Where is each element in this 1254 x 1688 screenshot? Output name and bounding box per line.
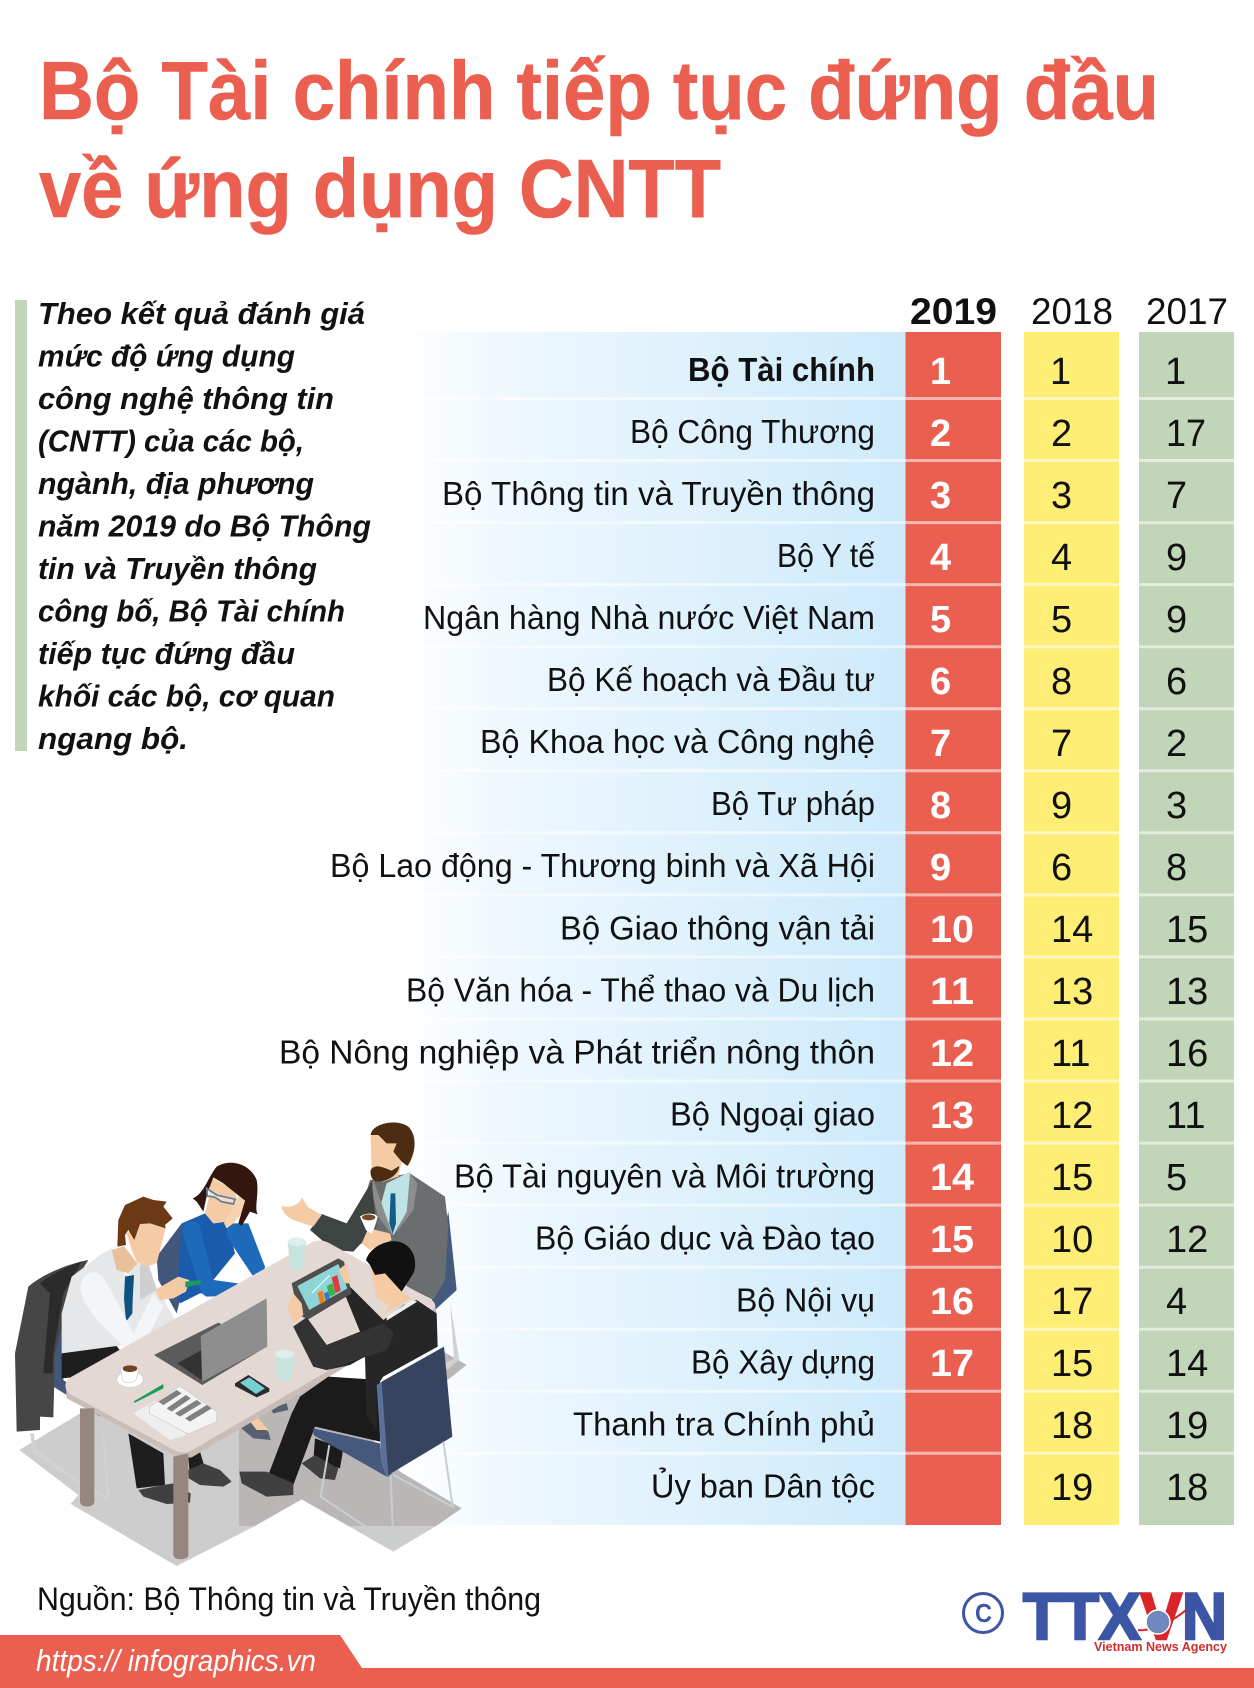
- accent bar: [15, 300, 27, 751]
- row 13: 13: [930, 1095, 974, 1137]
- row 11: 13: [1051, 971, 1093, 1013]
- row 9: Bộ Lao động - Thương binh và Xã Hội: [330, 847, 875, 884]
- row 10: Bộ Giao thông vận tải: [560, 910, 875, 946]
- jacket: [293, 1287, 438, 1430]
- shirt and tie: [62, 1248, 175, 1355]
- person: man in white shirt: [15, 1197, 232, 1504]
- row 10: 15: [1166, 909, 1208, 951]
- column headings: 2019: [910, 291, 997, 332]
- head: [112, 1246, 137, 1273]
- row 1: 1: [1165, 351, 1186, 393]
- row 1: [688, 351, 1186, 393]
- row 13: [670, 1095, 1205, 1137]
- row 9: 9: [930, 847, 951, 889]
- row 15: [535, 1219, 1208, 1261]
- intro paragraph: công bố, Bộ Tài chính: [38, 594, 345, 628]
- row 4: Bộ Y tế: [777, 537, 875, 574]
- row background gradient: [408, 332, 906, 1525]
- wordmark: TTXVN: [1023, 1579, 1227, 1653]
- row 7: 2: [1166, 723, 1187, 765]
- row 14: 14: [930, 1157, 974, 1199]
- row 8: 9: [1051, 785, 1072, 827]
- column: 2019: [906, 332, 1001, 1525]
- row 18: 18: [1051, 1405, 1093, 1447]
- row 16: 4: [1166, 1281, 1187, 1323]
- row 16: 16: [930, 1281, 974, 1323]
- row 2: 2: [930, 413, 951, 455]
- row 17: 15: [1051, 1343, 1093, 1385]
- panel: ranking table: [279, 291, 1234, 1525]
- row 11: 13: [1166, 971, 1208, 1013]
- row 19: [651, 1467, 1208, 1509]
- row 3: 3: [930, 475, 951, 517]
- illustration: meeting around a table: [15, 1123, 467, 1566]
- tablet: [292, 1258, 352, 1319]
- row 19: 18: [1166, 1467, 1208, 1509]
- chair and jacket: [53, 1287, 100, 1417]
- floor shadows: [19, 1352, 467, 1566]
- row 6: 8: [1051, 661, 1072, 703]
- row 14: 5: [1166, 1157, 1187, 1199]
- row 15: 12: [1166, 1219, 1208, 1261]
- person: man in dark suit with tablet: [239, 1241, 453, 1545]
- person: woman in blue: [157, 1163, 290, 1313]
- row 15: 15: [930, 1219, 974, 1261]
- row 19: 19: [1051, 1467, 1093, 1509]
- footer bar: [0, 1635, 1254, 1688]
- column headings: [910, 291, 1228, 332]
- row 10: [560, 909, 1208, 951]
- row 16: Bộ Nội vụ: [736, 1282, 875, 1318]
- website URL: https:// infographics.vn: [36, 1643, 316, 1678]
- row 14: Bộ Tài nguyên và Môi trường: [454, 1158, 875, 1194]
- hands: [287, 1293, 303, 1323]
- row 5: Ngân hàng Nhà nước Việt Nam: [423, 599, 875, 636]
- row 15: Bộ Giáo dục và Đào tạo: [535, 1220, 875, 1256]
- row 5: 5: [930, 599, 951, 641]
- row 4: 9: [1166, 537, 1187, 579]
- row 6: Bộ Kế hoạch và Đầu tư: [547, 661, 875, 698]
- row 2: Bộ Công Thương: [630, 413, 875, 450]
- intro paragraph: tin và Truyền thông: [38, 551, 317, 586]
- row 11: [406, 971, 1208, 1013]
- row 3: [442, 475, 1187, 517]
- row 1: 1: [1050, 351, 1071, 393]
- row 17: 17: [930, 1343, 974, 1385]
- head: [370, 1267, 412, 1313]
- row 19: Ủy ban Dân tộc: [651, 1468, 875, 1504]
- intro paragraph: tiếp tục đứng đầu: [38, 636, 295, 671]
- row 5: 5: [1051, 599, 1072, 641]
- pen: [133, 1384, 163, 1403]
- row 2: 17: [1166, 413, 1206, 455]
- chair: [313, 1428, 387, 1477]
- row 11: 11: [930, 971, 974, 1013]
- row 3: 3: [1051, 475, 1072, 517]
- panel: intro text: [15, 296, 371, 756]
- row 8: [711, 785, 1187, 827]
- row 14: 15: [1051, 1157, 1093, 1199]
- row 1: Bộ Tài chính: [688, 351, 875, 388]
- row 12: [279, 1033, 1208, 1075]
- logo: TTXVN: [964, 1579, 1228, 1654]
- column headings: 2018: [1031, 291, 1113, 332]
- row 6: [547, 661, 1187, 703]
- row 18: [573, 1405, 1208, 1447]
- row 12: 16: [1166, 1033, 1208, 1075]
- row 12: Bộ Nông nghiệp và Phát triển nông thôn: [279, 1034, 875, 1070]
- row 9: [330, 847, 1187, 889]
- papers: [133, 1386, 217, 1440]
- row 1: 1: [930, 351, 951, 393]
- intro paragraph: Theo kết quả đánh giá: [38, 296, 365, 331]
- intro paragraph: ngành, địa phương: [38, 466, 314, 501]
- row 8: 8: [930, 785, 951, 827]
- shoes of the woman: [239, 1403, 288, 1440]
- row 13: 11: [1166, 1095, 1205, 1137]
- phone: [235, 1375, 269, 1397]
- row 4: 4: [930, 537, 951, 579]
- row 2: [630, 413, 1206, 455]
- row 15: 10: [1051, 1219, 1093, 1261]
- row 17: [691, 1343, 1208, 1385]
- intro paragraph: mức độ ứng dụng: [38, 338, 295, 374]
- glass: [275, 1350, 294, 1380]
- row 5: [423, 599, 1187, 641]
- agency name: Vietnam News Agency: [1094, 1639, 1228, 1654]
- intro paragraph: khối các bộ, cơ quan: [38, 678, 335, 714]
- copyright mark: C: [975, 1598, 992, 1628]
- intro paragraph: (CNTT) của các bộ,: [38, 424, 304, 458]
- row 6: 6: [930, 661, 951, 703]
- intro paragraph: năm 2019 do Bộ Thông: [38, 508, 371, 544]
- row 17: 14: [1166, 1343, 1208, 1385]
- row 18: 19: [1166, 1405, 1208, 1447]
- column headings: 2017: [1146, 291, 1228, 332]
- intro paragraph: [38, 296, 371, 756]
- intro paragraph: công nghệ thông tin: [38, 381, 334, 416]
- row 11: Bộ Văn hóa - Thể thao và Du lịch: [406, 972, 875, 1008]
- row 17: Bộ Xây dựng: [691, 1344, 875, 1380]
- person: bearded man: [282, 1123, 459, 1370]
- row 7: [480, 723, 1187, 765]
- row 7: 7: [1051, 723, 1072, 765]
- trousers: [62, 1346, 120, 1378]
- row 10: 10: [930, 909, 974, 951]
- row 6: 6: [1166, 661, 1187, 703]
- row 13: Bộ Ngoại giao: [670, 1096, 875, 1132]
- row 3: Bộ Thông tin và Truyền thông: [442, 475, 875, 512]
- row 3: 7: [1166, 475, 1187, 517]
- row 8: Bộ Tư pháp: [711, 785, 875, 822]
- title: Bộ Tài chính tiếp tục đứng đầu: [39, 44, 1159, 137]
- row 12: 12: [930, 1033, 974, 1075]
- intro paragraph: ngang bộ.: [38, 721, 188, 756]
- globe and swoosh: [1138, 1610, 1186, 1634]
- title: về ứng dụng CNTT: [39, 142, 721, 235]
- copyright mark: [964, 1594, 1002, 1632]
- column: 2017: [1139, 332, 1234, 1525]
- row 18: Thanh tra Chính phủ: [573, 1406, 875, 1442]
- row 16: 17: [1051, 1281, 1093, 1323]
- row 10: 14: [1051, 909, 1093, 951]
- column: 2018: [1024, 332, 1119, 1525]
- laptop: [154, 1298, 267, 1385]
- row 14: [454, 1157, 1187, 1199]
- title: [39, 44, 1159, 235]
- row 7: 7: [930, 723, 951, 765]
- source: Nguồn: Bộ Thông tin và Truyền thông: [37, 1581, 541, 1617]
- coffee cup: [117, 1365, 143, 1388]
- row 12: 11: [1051, 1033, 1090, 1075]
- row 5: 9: [1166, 599, 1187, 641]
- row 13: 12: [1051, 1095, 1093, 1137]
- row 4: 4: [1051, 537, 1072, 579]
- row 2: 2: [1051, 413, 1072, 455]
- row 4: [777, 537, 1187, 579]
- row 16: [736, 1281, 1187, 1323]
- table: [65, 1237, 437, 1559]
- trousers and shoes: [268, 1377, 380, 1485]
- row 7: Bộ Khoa học và Công nghệ: [480, 723, 875, 760]
- row 9: 6: [1051, 847, 1072, 889]
- row 8: 3: [1166, 785, 1187, 827]
- row 9: 8: [1166, 847, 1187, 889]
- glass: [288, 1237, 306, 1270]
